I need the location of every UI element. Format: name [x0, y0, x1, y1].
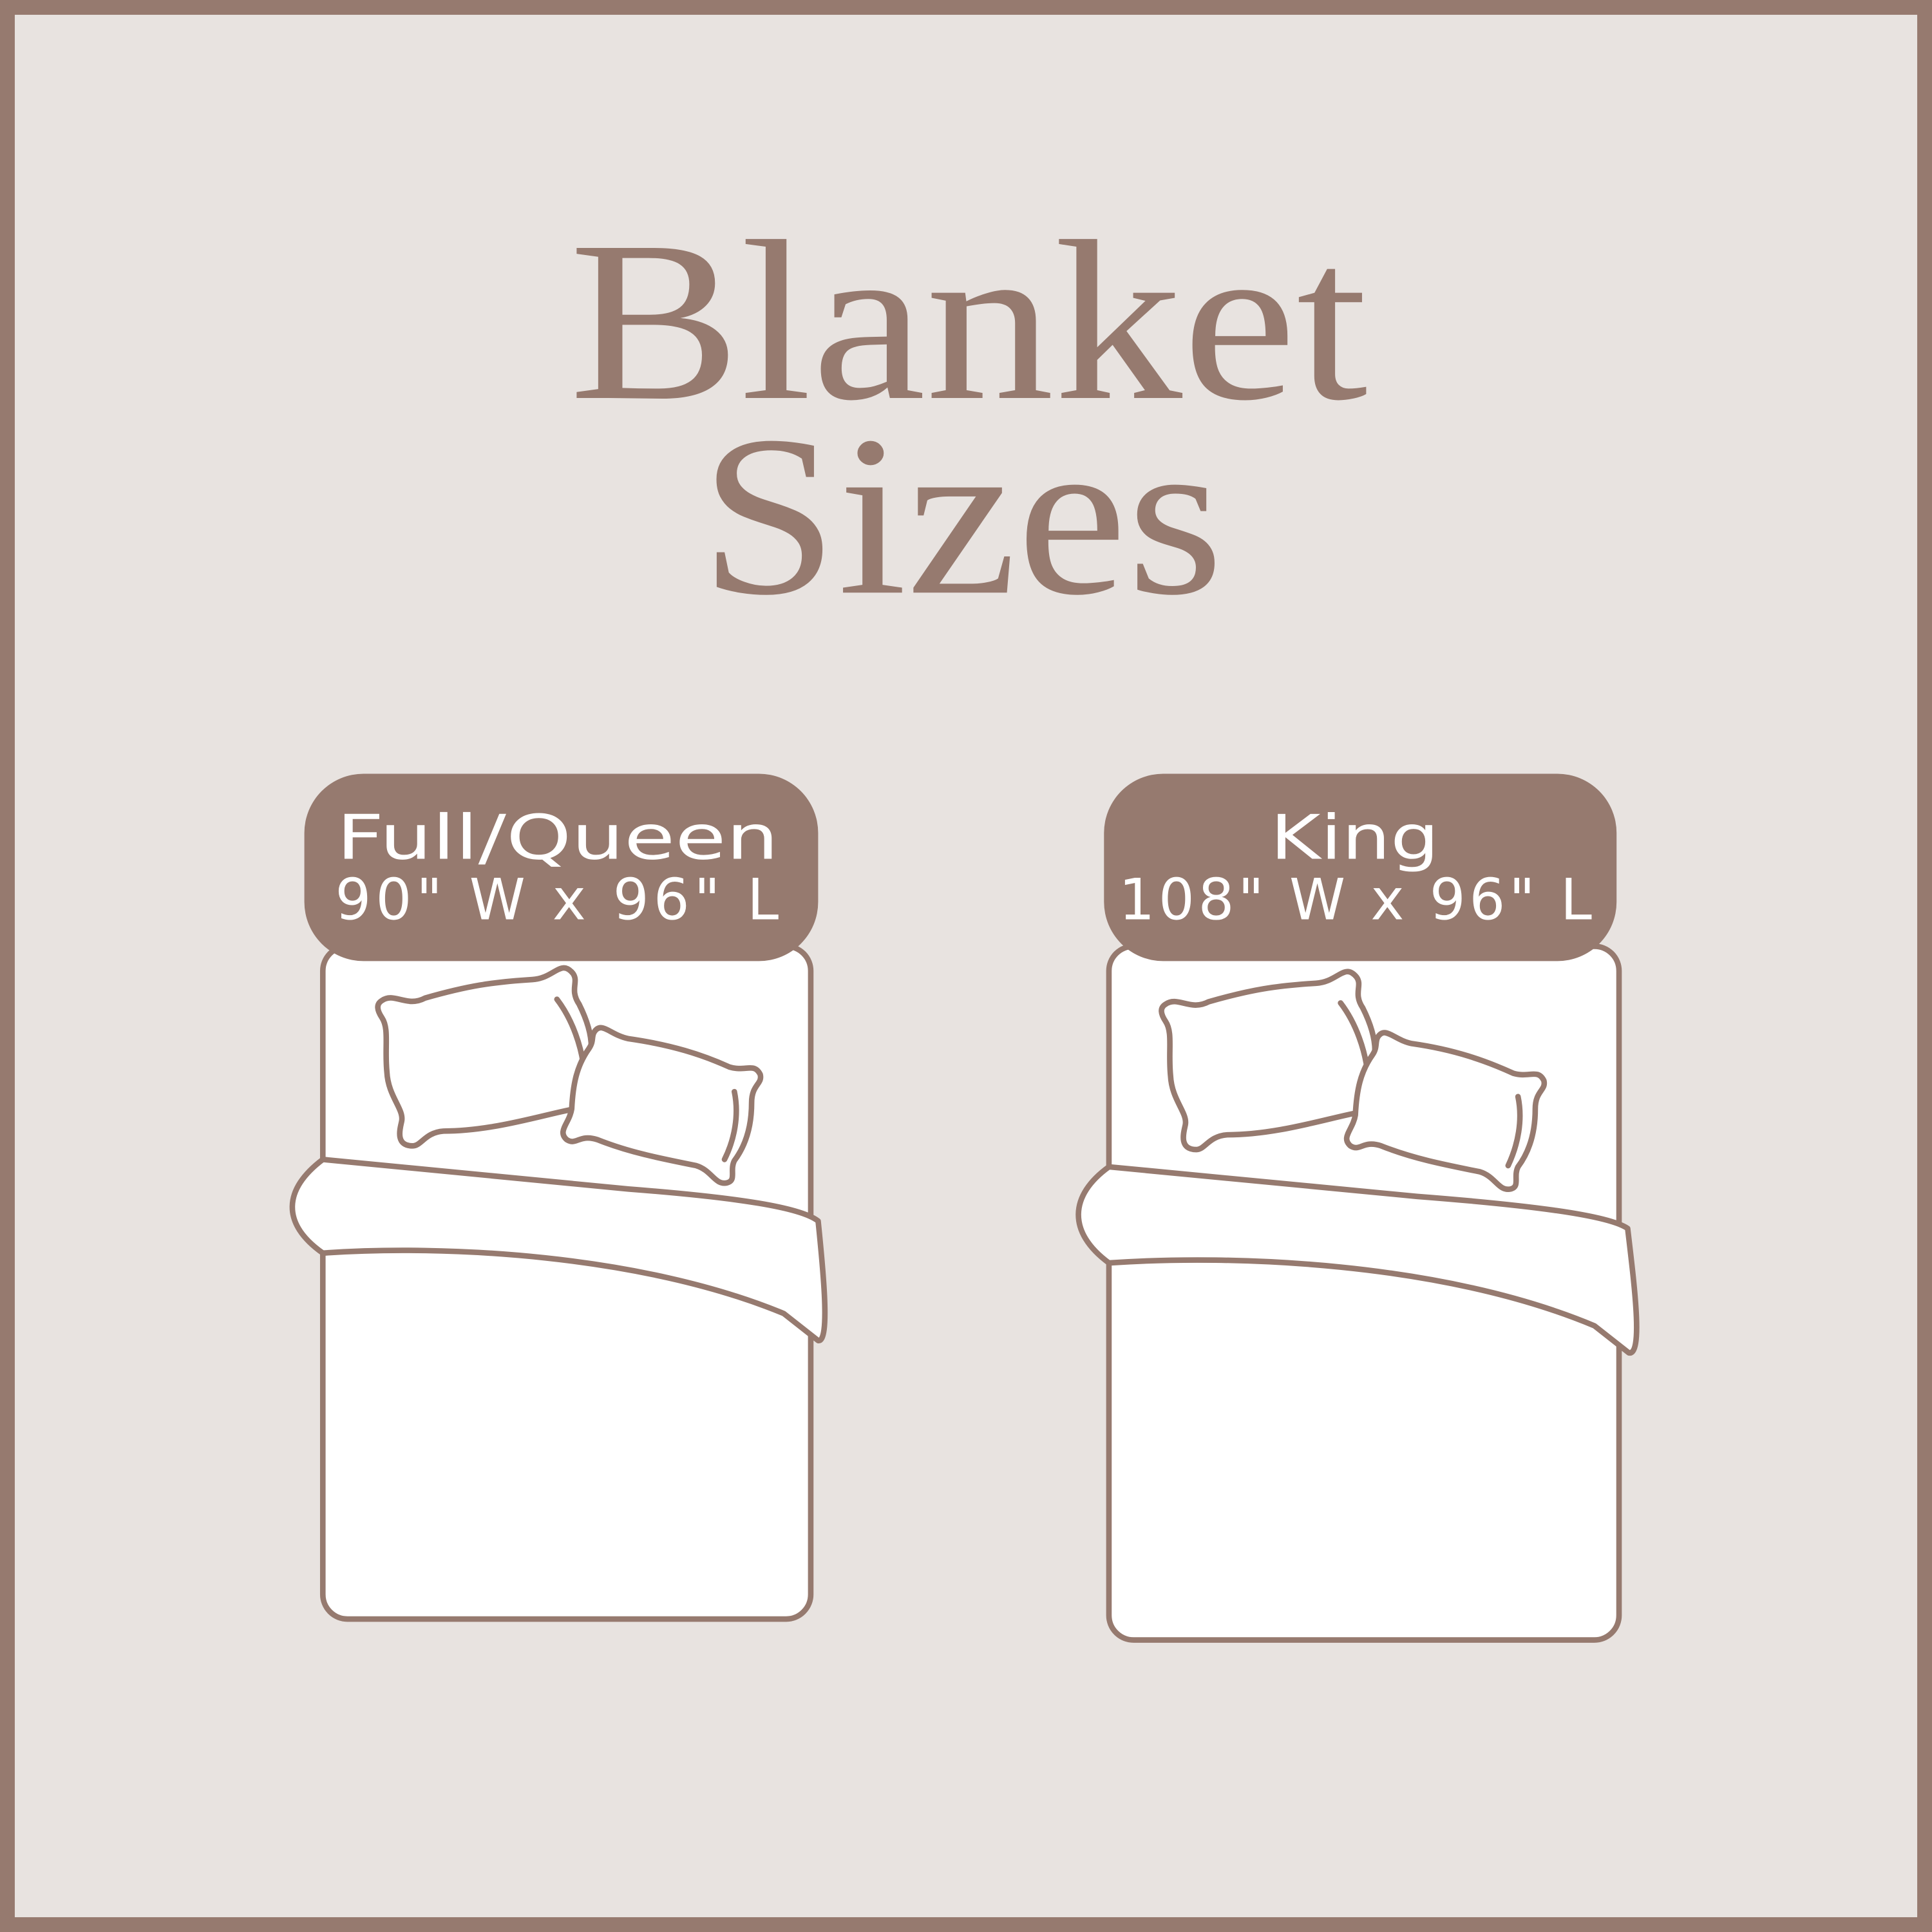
title: Blanket	[569, 194, 1368, 448]
folded blanket	[1079, 1167, 1636, 1353]
title: Sizes	[700, 388, 1224, 642]
label: full/queen: 90" W x 96" L	[335, 866, 779, 933]
title	[569, 194, 1368, 642]
pillow right	[563, 1028, 761, 1183]
label: king	[1104, 774, 1616, 961]
label: king: King	[1271, 802, 1439, 874]
bed frame	[1109, 946, 1619, 1640]
folded blanket	[292, 1159, 825, 1341]
label: full/queen: Full/Queen	[336, 802, 779, 874]
pillow left	[378, 968, 591, 1146]
label: king: 108" W x 96" L	[1119, 866, 1592, 933]
bed: full/queen	[292, 946, 825, 1619]
pillow right	[1347, 1032, 1544, 1189]
bed: king	[1079, 946, 1636, 1640]
bed frame	[323, 946, 811, 1619]
label: full/queen	[305, 774, 818, 961]
pillow left	[1161, 972, 1375, 1150]
